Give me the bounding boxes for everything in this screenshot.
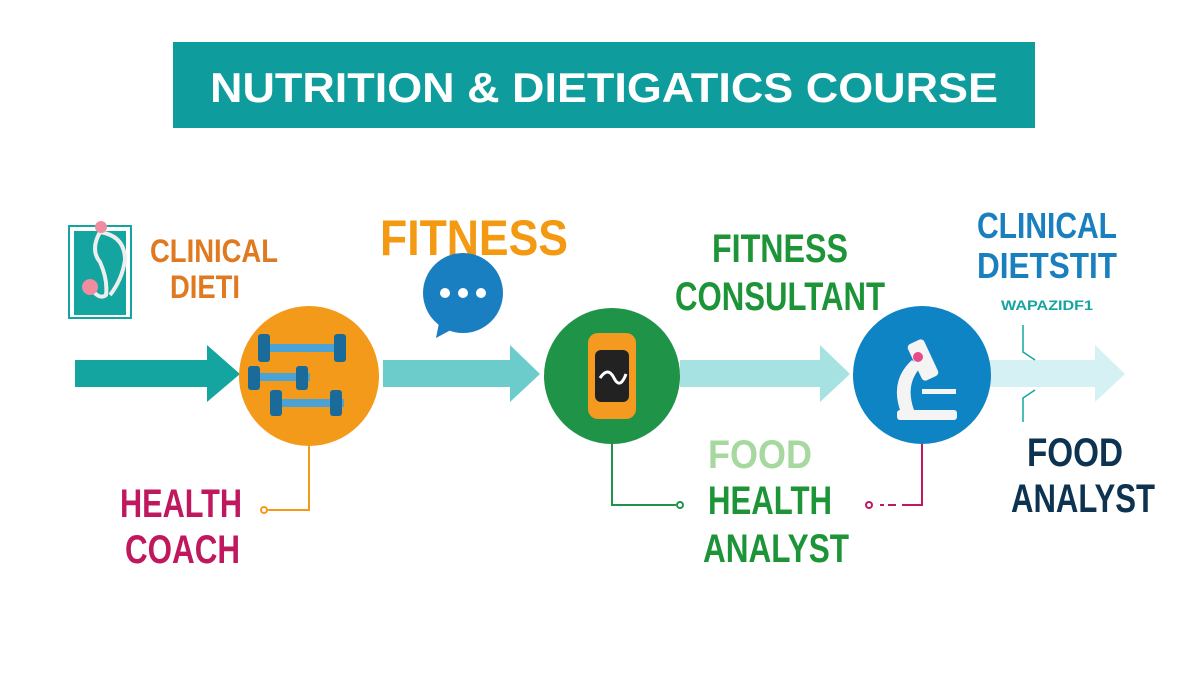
text: food health analyst: ANALYST xyxy=(703,527,849,571)
text: clinical dieti: DIETI xyxy=(170,269,240,305)
arrow 3 xyxy=(680,345,850,402)
bracket marks xyxy=(1023,325,1035,422)
connector: food health analyst xyxy=(612,444,683,508)
text: fitness consultant: CONSULTANT xyxy=(675,275,885,319)
text: clinical dietstit xyxy=(977,205,1117,286)
text: fitness consultant: FITNESS xyxy=(712,227,848,271)
text: clinical dieti: CLINICAL xyxy=(150,233,278,269)
circle: fitness tracker xyxy=(544,308,680,444)
text: food health analyst: HEALTH xyxy=(708,479,832,523)
icon: clipboard stethoscope xyxy=(69,221,131,318)
text: clinical dietstit: DIETSTIT xyxy=(977,245,1117,286)
circle: microscope xyxy=(853,306,991,444)
text: health coach xyxy=(120,482,242,572)
icon: speech bubble xyxy=(423,253,503,338)
text: clinical dieti xyxy=(150,233,278,305)
text: food health analyst: FOOD xyxy=(708,433,812,477)
text: food analyst: FOOD xyxy=(1027,431,1123,475)
text: food analyst: ANALYST xyxy=(1011,477,1155,521)
text: fitness consultant xyxy=(675,227,885,319)
text: wapazidf1: WAPAZIDF1 xyxy=(1001,297,1093,313)
text: food health analyst xyxy=(703,433,849,571)
circle: dumbbells xyxy=(239,306,379,446)
connector: food analyst xyxy=(866,444,922,508)
text: health coach: HEALTH xyxy=(120,482,242,526)
text: health coach: COACH xyxy=(125,528,240,572)
text: fitness: FITNESS xyxy=(380,210,568,266)
title xyxy=(173,42,1035,128)
arrow 1 xyxy=(75,345,240,402)
text: clinical dietstit: CLINICAL xyxy=(977,205,1117,246)
arrow 4 xyxy=(990,345,1125,402)
arrow 2 xyxy=(383,345,540,402)
title: NUTRITION & DIETIGATICS COURSE xyxy=(210,64,998,111)
text: food analyst xyxy=(1011,431,1155,521)
connector: health coach xyxy=(261,446,309,513)
